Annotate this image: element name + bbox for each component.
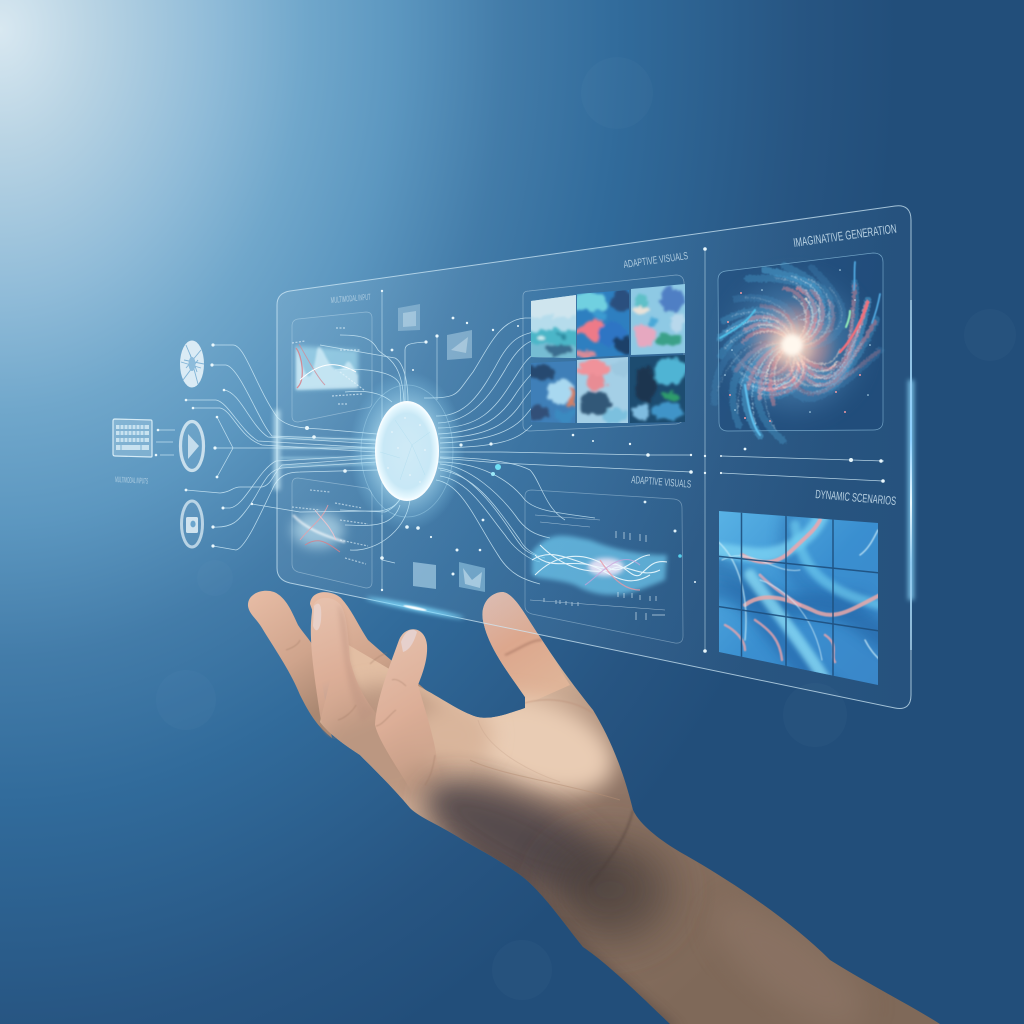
front finger (375, 629, 448, 806)
wave tiles (719, 511, 878, 685)
galaxy accent streaks (720, 262, 880, 435)
tile 2 (577, 290, 629, 358)
orb halo (349, 371, 465, 531)
icon: keyboard (113, 419, 152, 457)
frame (718, 253, 883, 431)
heading: DYNAMIC SCENARIOS (815, 487, 897, 508)
orb body (375, 401, 439, 501)
panel outline (277, 206, 911, 708)
bundle glow (280, 438, 376, 466)
glass panel (274, 206, 914, 708)
tile 6 (630, 355, 685, 423)
right edge glow (908, 300, 914, 650)
wave chart (530, 515, 667, 620)
outer finger (248, 591, 332, 738)
frame (525, 490, 683, 643)
card (447, 330, 472, 360)
upper input preview: MULTIMODAL INPUT (330, 292, 371, 305)
finger creases (286, 640, 435, 785)
horizontal bundle (440, 452, 884, 481)
tile 5 (577, 357, 628, 423)
heading: ADAPTIVE VISUALS (631, 474, 692, 491)
left input icons (113, 340, 204, 547)
panel: imaginative generation galaxy (681, 222, 897, 463)
lower input preview (292, 478, 372, 588)
small floating cards (398, 304, 485, 592)
preview frame (292, 478, 372, 588)
panel: adaptive visuals grid (520, 250, 690, 431)
grid lines (715, 505, 880, 680)
lines right of orb, lower fan (436, 457, 595, 584)
tile 1 (531, 295, 576, 358)
panel: lower adaptive visuals wave (525, 474, 692, 643)
lines right of orb, upper fan (424, 318, 560, 448)
decorative bokeh circles (156, 57, 1016, 1000)
card (413, 562, 436, 589)
mini chart (292, 490, 368, 564)
galaxy spiral (681, 243, 897, 463)
circuit nodes (155, 247, 885, 653)
lines left of orb (156, 335, 426, 563)
icon: camera (182, 501, 202, 547)
central glowing orb (349, 371, 465, 531)
upper input preview (292, 292, 372, 422)
hand shading (315, 592, 883, 1024)
heading: ADAPTIVE VISUALS (623, 250, 689, 271)
icon: play button (180, 422, 204, 470)
orb texture (380, 417, 430, 483)
frame (523, 275, 684, 431)
palm and forearm (320, 592, 940, 1024)
preview frame (292, 312, 372, 422)
panel surface (277, 206, 911, 708)
left input icons: MULTIMODAL INPUTS (115, 475, 148, 486)
bottom edge flare (366, 595, 464, 621)
hand reaching up (248, 591, 940, 1024)
card (459, 562, 485, 592)
front fingernail (401, 630, 417, 652)
mini chart (292, 328, 364, 404)
circuit lines (156, 249, 884, 650)
heading: IMAGINATIVE GENERATION (792, 222, 897, 250)
middle finger (311, 598, 402, 748)
tile 4 (531, 361, 576, 423)
panel: dynamic scenarios grid (712, 487, 897, 690)
vertical guides (382, 249, 705, 650)
back finger (310, 592, 428, 730)
left edge glow (274, 410, 280, 490)
middle fingernail (313, 604, 321, 630)
middle finger side shade (338, 604, 375, 722)
card (398, 304, 420, 331)
tile 3 (631, 284, 685, 355)
orb ring (361, 385, 453, 517)
icon: aperture (180, 340, 204, 388)
